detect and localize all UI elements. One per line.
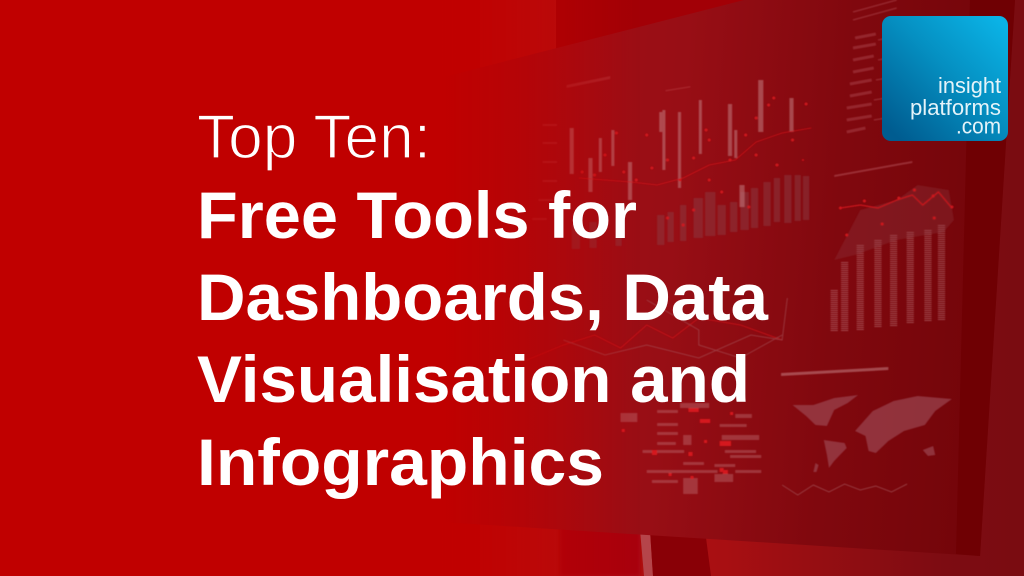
- panel: bar and scatter chart: [532, 76, 811, 249]
- panel: world map: [781, 367, 952, 495]
- panel: red list table: [621, 403, 761, 494]
- red data line: [579, 128, 811, 185]
- logo wordmark: [910, 73, 1001, 138]
- title line: Infographics: Infographics: [197, 425, 604, 499]
- dark lower bars: [572, 175, 809, 249]
- left fade overlay: [430, 0, 640, 576]
- panel: column dot chart: [834, 161, 954, 331]
- red points: [839, 188, 953, 236]
- map sparkline: [782, 484, 907, 495]
- red scatter points: [581, 96, 808, 226]
- map title: [781, 367, 888, 376]
- dotted columns: [834, 225, 941, 331]
- panel: top right data table: [847, 0, 899, 132]
- logo wordmark: insight: [938, 73, 1001, 98]
- panel: line chart: [527, 298, 787, 360]
- logo: insight platforms: [882, 16, 1008, 141]
- monitor body: [440, 0, 1015, 556]
- chart title: [834, 161, 912, 177]
- monitor stand: [640, 530, 711, 576]
- title line: Dashboards, Data: Dashboards, Data: [197, 260, 769, 334]
- logo wordmark: platforms: [910, 95, 1001, 120]
- light upper bars: [570, 80, 794, 207]
- red trend line: [840, 192, 952, 208]
- logo tile: [882, 16, 1008, 141]
- title line: Visualisation and: Visualisation and: [197, 342, 750, 416]
- monitor bezel: [956, 0, 1015, 556]
- logo wordmark: .com: [956, 114, 1001, 138]
- map land masses: [793, 395, 952, 472]
- light row bars: [621, 403, 761, 494]
- title line: Free Tools for: Free Tools for: [197, 178, 637, 252]
- red highlights: [622, 408, 733, 479]
- monitor with dashboard screen: [440, 0, 1015, 556]
- area band: [834, 185, 954, 260]
- chart headings: [532, 76, 690, 220]
- dashboard charts: [527, 0, 954, 495]
- title line: Top Ten: Top Ten:: [197, 103, 431, 172]
- title: [197, 103, 769, 499]
